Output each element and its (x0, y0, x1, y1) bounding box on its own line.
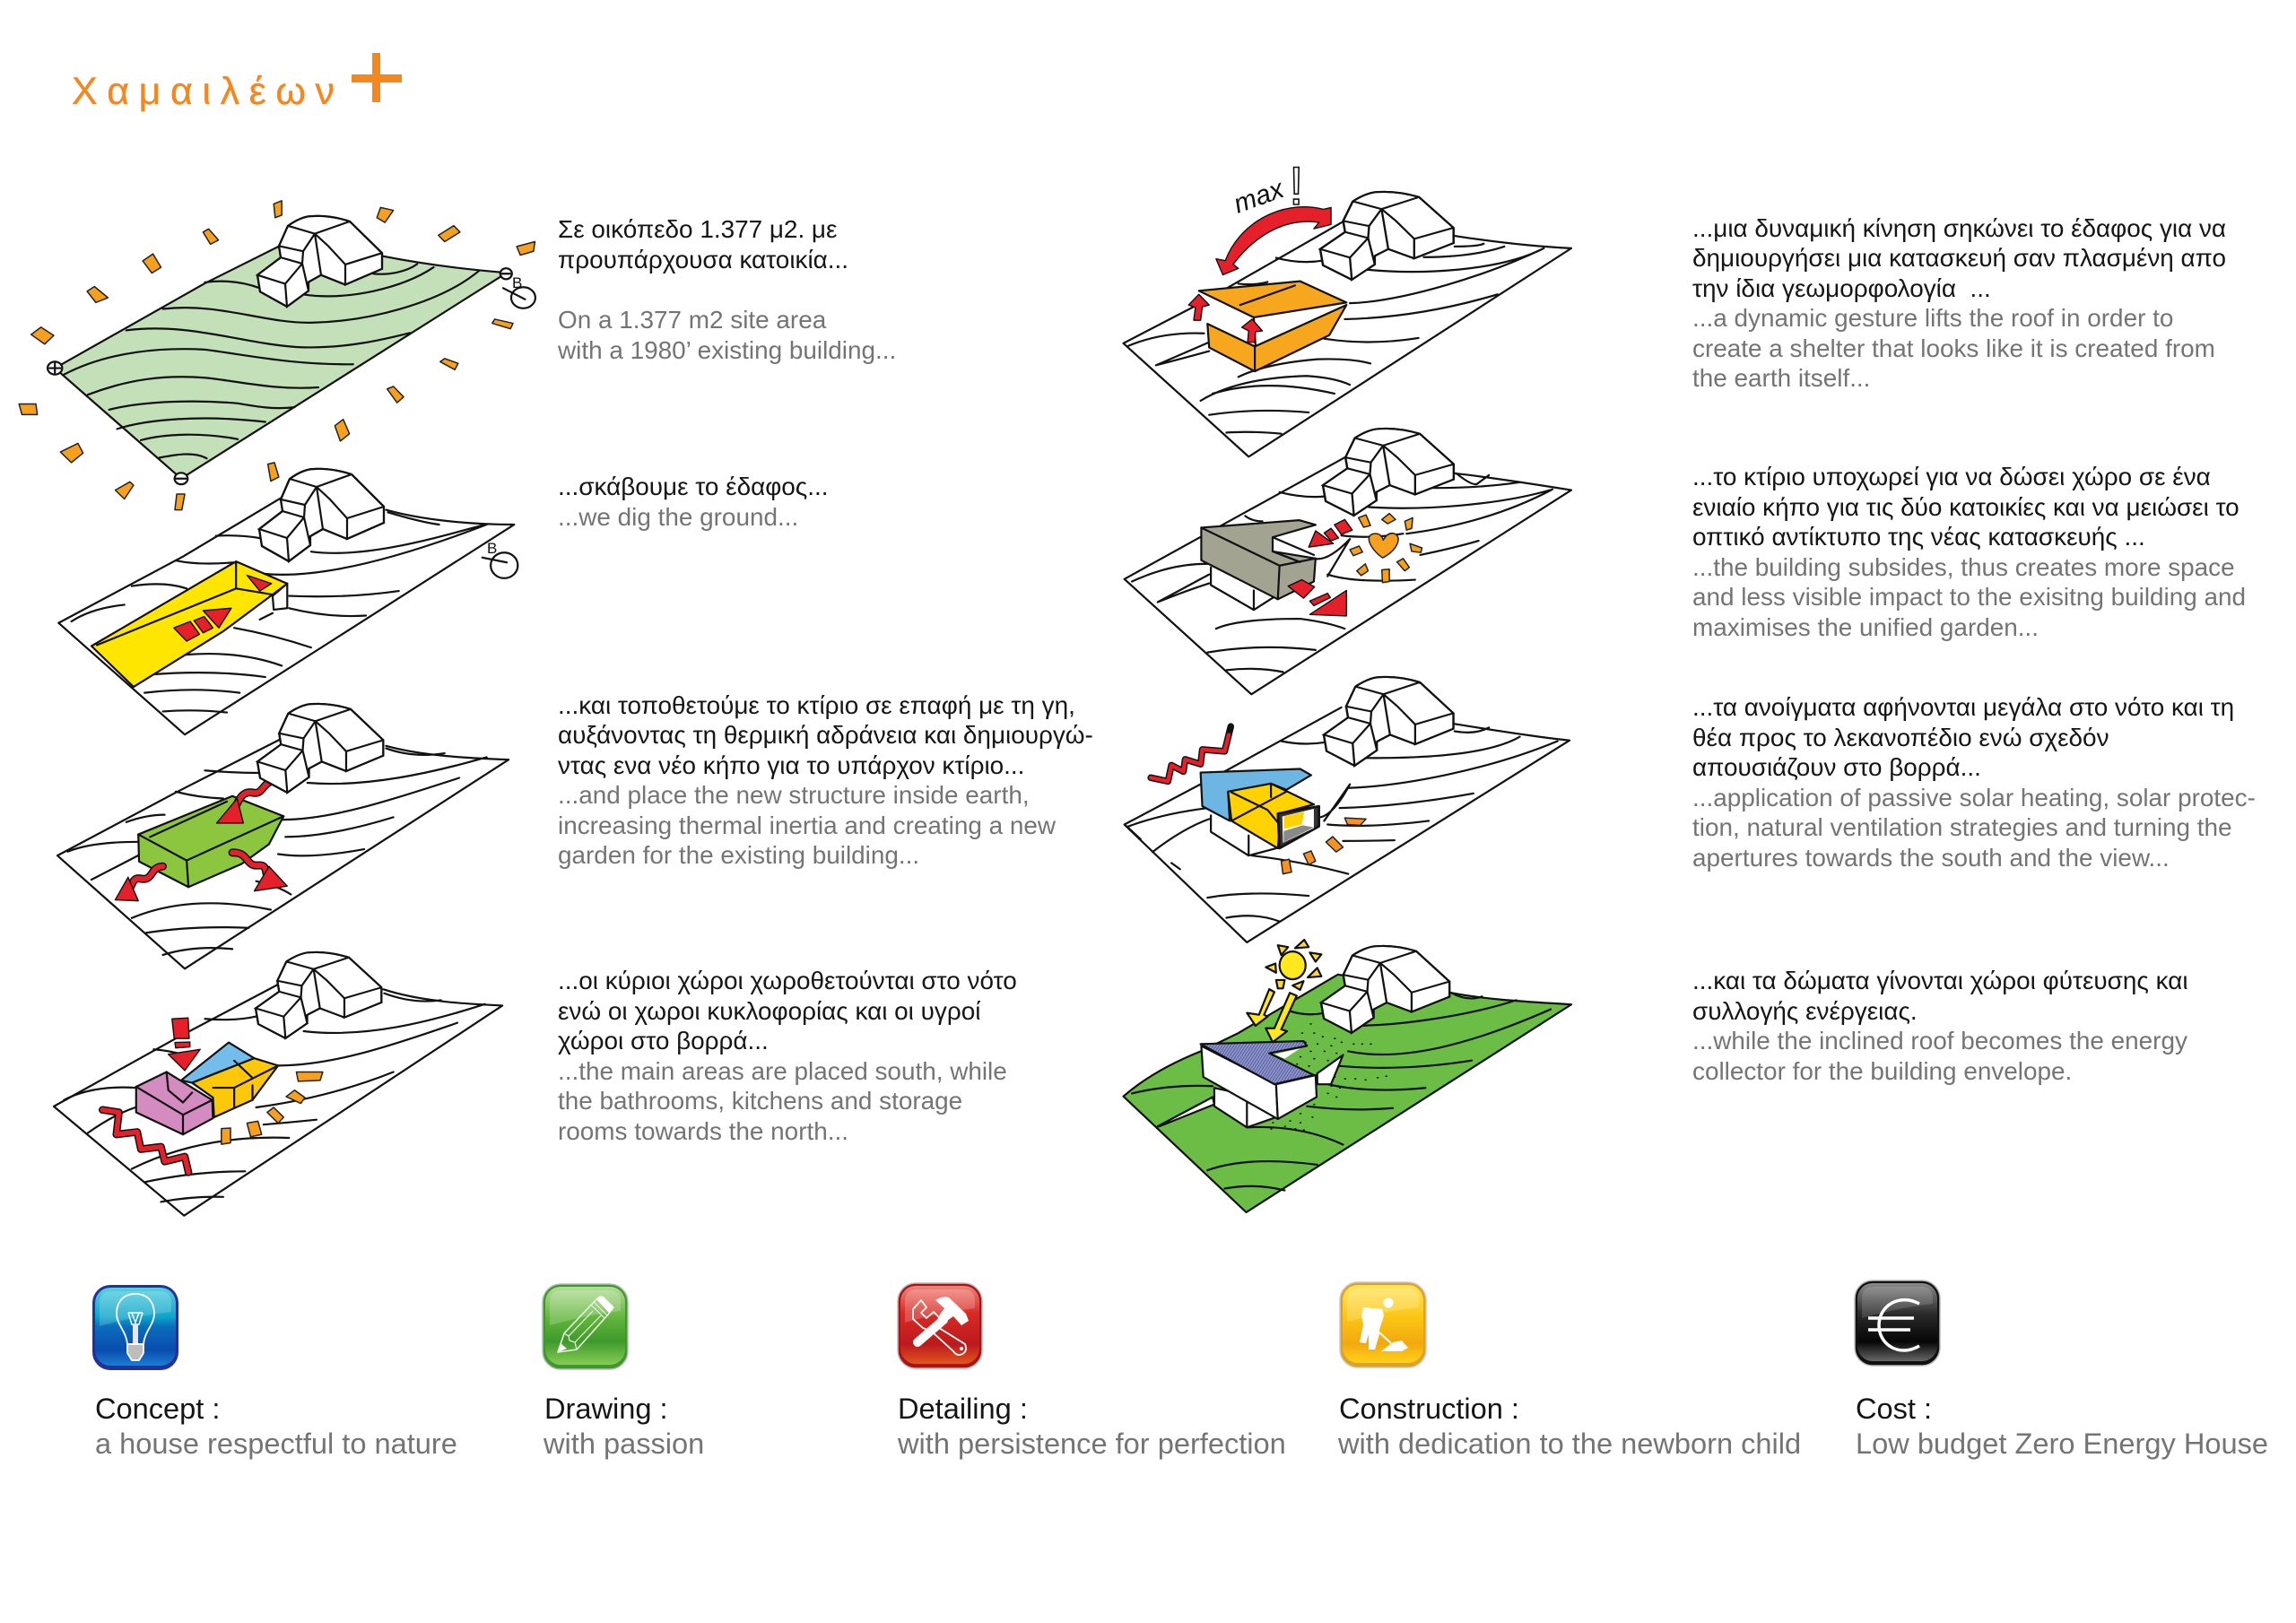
yellow solar arrows (1247, 989, 1297, 1042)
text: step 8: συλλογής ενέργειας. (1692, 997, 1918, 1025)
caption: construction: with dedication to the newborn child (1337, 1427, 1801, 1460)
sketch 5: lifted roof (1124, 207, 1571, 456)
text: step 7: tion, natural ventilation strategies and turning the (1692, 813, 2232, 841)
text: step 8 (1692, 967, 2188, 1085)
text: step 3: ντας ενα νέο κήπο για το υπάρχον κτίριο... (558, 751, 1024, 779)
text: step 7: απουσιάζουν στο βορρά... (1692, 753, 1981, 781)
text: step 6: and less visible impact to the exisitng building and (1692, 583, 2246, 611)
caption: construction (1337, 1392, 1801, 1460)
red wavy arrows (116, 780, 287, 901)
red zigzag (1151, 726, 1231, 781)
text: step 6: ...το κτίριο υποχωρεί για να δώσει χώρο σε ένα (1692, 463, 2211, 490)
sketch 2 house (259, 469, 384, 561)
white slit (1158, 1097, 1214, 1126)
icon: orange plus (352, 53, 402, 102)
text: step 2 (558, 473, 829, 531)
caption: detailing (897, 1392, 1286, 1460)
icon: cost euro (1855, 1280, 1940, 1366)
sketch 1: existing site plot (19, 201, 535, 484)
text: step 4: the bathrooms, kitchens and storage (558, 1087, 962, 1115)
icon: site corner markers (48, 268, 512, 484)
lower white wall (1211, 568, 1276, 610)
orange marker tabs (1282, 818, 1366, 874)
green building (138, 796, 283, 887)
text: step 2: ...σκάβουμε το έδαφος... (558, 473, 829, 500)
icon: north arrow (503, 287, 535, 308)
white gap wedges (1318, 1055, 1343, 1084)
sketch 6 house (1323, 429, 1454, 516)
text: step 5: ...a dynamic gesture lifts the roof in order to (1692, 304, 2173, 332)
text: step 7: ...τα ανοίγματα αφήνονται μεγάλα στο νότο και τη (1692, 693, 2234, 721)
sketch 6: building subsides, garden (1125, 457, 1571, 694)
icon: concept light bulb (92, 1285, 178, 1370)
icon: north arrow (483, 552, 517, 578)
text: step 8: ...και τα δώματα γίνονται χώροι φύτευσης και (1692, 967, 2188, 994)
handwritten max: max (1230, 174, 1289, 220)
icon: construction worker (1340, 1282, 1426, 1367)
text: step 1: Σε οικόπεδο 1.377 μ2. με (558, 215, 837, 243)
white building walls (1201, 1046, 1317, 1127)
sketch 1 house (257, 216, 382, 307)
text: step 1 (557, 215, 896, 364)
caption: concept: Concept : (95, 1392, 220, 1425)
sketch 3: green volume in earth (57, 739, 509, 968)
text: step 5 (1692, 214, 2226, 392)
icon: orange heart with rays (1350, 514, 1422, 583)
text: step 1: προυπάρχουσα κατοικία... (558, 246, 848, 273)
text: step 3: αυξάνοντας τη θερμική αδράνεια και δημιουργώ- (558, 721, 1093, 749)
zoned building (136, 1043, 278, 1134)
red lift arrows (1188, 294, 1263, 343)
text: step 4: ...οι κύριοι χώροι χωροθετούνται στο νότο (558, 967, 1017, 994)
text: step 4: rooms towards the north... (558, 1117, 848, 1145)
sketch 7 house (1324, 677, 1454, 766)
lifted orange volume (1199, 282, 1346, 371)
orange marker tabs (222, 1072, 323, 1144)
caption: detailing: Detailing : (898, 1392, 1028, 1425)
caption: cost: Cost : (1856, 1392, 1932, 1425)
icon: drawing pencil (543, 1284, 628, 1369)
text: step 6: οπτικό αντίκτυπο της νέας κατασκευής ... (1692, 523, 2145, 551)
title: Χαμαιλέων (72, 70, 335, 113)
text: step 7: ...application of passive solar heating, solar protec- (1692, 784, 2256, 812)
icon: detailing hammer and wrench (898, 1283, 982, 1368)
text: step 5: the earth itself... (1692, 364, 1870, 392)
red curved arrow (1216, 207, 1331, 275)
text: step 2: ...we dig the ground... (558, 503, 798, 531)
text: step 4 (558, 967, 1017, 1145)
caption: drawing: Drawing : (544, 1392, 668, 1425)
handwritten max: ! (1289, 156, 1304, 216)
text: step 1: On a 1.377 m2 site area (558, 306, 827, 334)
planting dots (1271, 1024, 1387, 1130)
excavation pit (91, 561, 287, 687)
caption: drawing: with passion (543, 1427, 704, 1460)
text: step 6: maximises the unified garden... (1692, 613, 2039, 641)
caption: cost (1856, 1392, 2268, 1460)
text: step 8: collector for the building envelope. (1692, 1057, 2072, 1085)
sketch 7: apertures and solar (1125, 707, 1570, 942)
sketch 3 house (257, 704, 383, 793)
text: step 5: create a shelter that looks like it is created from (1692, 334, 2215, 362)
text: step 7: apertures towards the south and the view... (1692, 844, 2170, 872)
handwritten max (1230, 156, 1304, 220)
sketch 5 house (1320, 192, 1454, 280)
text: step 4: ...the main areas are placed south, while (558, 1057, 1007, 1085)
yellow volume (1228, 784, 1319, 848)
caption: detailing: with persistence for perfection (897, 1427, 1286, 1460)
text: step 6 (1692, 463, 2246, 641)
sketch 8: green roof and energy collector (1124, 940, 1571, 1212)
text: step 6: ενιαίο κήπο για τις δύο κατοικίες και να μειώσει το (1692, 493, 2239, 521)
text: step 1: with a 1980’ existing building... (557, 336, 896, 364)
text: step 6: ...the building subsides, thus creates more space (1692, 553, 2235, 581)
text: step 8: ...while the inclined roof becomes the energy (1692, 1027, 2187, 1055)
red zigzag (102, 1110, 188, 1172)
north label: B (512, 274, 522, 291)
text: step 5: δημιουργήσει μια κατασκευή σαν πλασμένη απο (1692, 244, 2226, 272)
text: step 3 (558, 691, 1093, 869)
text: step 5: ...μια δυναμική κίνηση σηκώνει το έδαφος για να (1692, 214, 2226, 242)
red arrows (1288, 519, 1352, 616)
grey L-shaped block (1201, 520, 1316, 599)
caption: construction: Construction : (1339, 1392, 1519, 1425)
sketch 4 house (256, 952, 381, 1038)
hatched solar roof (1201, 1041, 1314, 1084)
sketch 4: room zoning (54, 985, 502, 1216)
red arrow from north (169, 1018, 200, 1071)
text: step 3: ...and place the new structure inside earth, (558, 781, 1030, 809)
text: step 3: garden for the existing building... (558, 841, 919, 869)
red arrows (174, 576, 272, 641)
text: step 3: increasing thermal inertia and creating a new (558, 812, 1057, 839)
text: step 3: ...και τοποθετούμε το κτίριο σε επαφή με τη γη, (558, 691, 1075, 719)
north label: B (487, 540, 497, 557)
title (72, 53, 402, 113)
caption: concept (95, 1392, 457, 1460)
text: step 4: χώροι στο βορρά... (558, 1027, 769, 1055)
text: step 7 (1692, 693, 2256, 872)
text: step 4: ενώ οι χωροι κυκλοφορίας και οι υγροί (558, 997, 980, 1025)
sketch 2: digging the ground (58, 482, 517, 734)
blue roof (1201, 769, 1311, 820)
orange marker tabs (19, 201, 535, 482)
caption: cost: Low budget Zero Energy House (1856, 1427, 2268, 1460)
lower white wall (1211, 815, 1276, 855)
icon: sun (1265, 940, 1321, 990)
caption: concept: a house respectful to nature (95, 1427, 457, 1460)
text: step 5: την ίδια γεωμορφολογία ... (1692, 274, 1991, 302)
sketch 8 house (1321, 946, 1449, 1033)
text: step 7: θέα προς το λεκανοπέδιο ενώ σχεδόν (1692, 724, 2109, 751)
caption: drawing (543, 1392, 704, 1460)
orange marker tabs (116, 482, 185, 510)
